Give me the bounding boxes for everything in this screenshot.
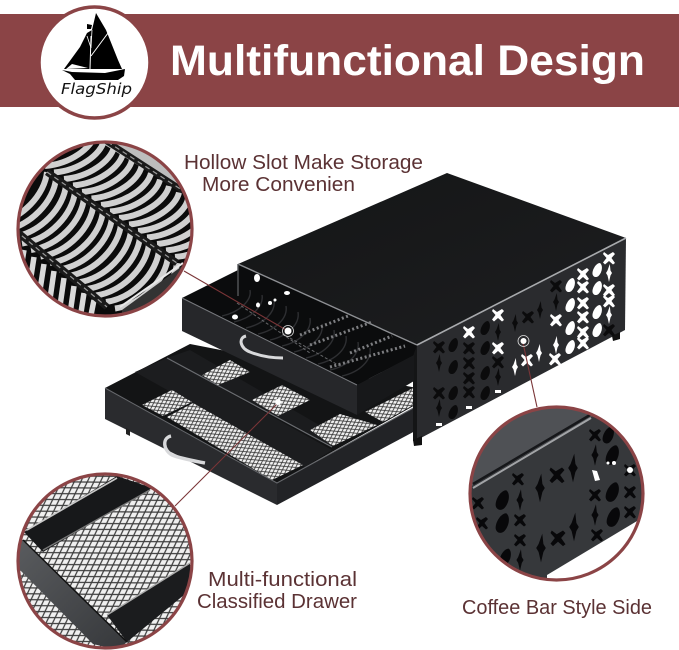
drawer handle bbox=[165, 436, 205, 463]
drawer handle bbox=[241, 336, 283, 358]
lower stripes bbox=[20, 250, 94, 320]
logo wordmark: FlagShip bbox=[61, 80, 132, 98]
icon: sailing ship bbox=[62, 13, 125, 80]
divider band upper bbox=[24, 476, 152, 552]
label: classified drawer bbox=[197, 568, 357, 613]
label: hollow slot: Hollow Slot Make Storage bbox=[184, 151, 423, 174]
logo: FlagShip bbox=[39, 7, 150, 118]
label: coffee bar side: Coffee Bar Style Side bbox=[462, 596, 652, 619]
leader line: side bbox=[518, 336, 537, 407]
cabinet top bbox=[238, 173, 626, 345]
label: hollow slot: More Convenien bbox=[202, 173, 355, 196]
leader line: slot bbox=[184, 271, 294, 336]
rack bars bbox=[15, 137, 185, 307]
divider band lower bbox=[107, 563, 190, 642]
label: classified drawer: Classified Drawer bbox=[197, 590, 357, 613]
arcs upper bbox=[45, 144, 190, 260]
product: drawer organizer bbox=[105, 173, 626, 505]
detail circle: mesh drawer bbox=[15, 470, 195, 650]
side cut-outs bbox=[472, 427, 636, 571]
cut-outs: dark bbox=[433, 280, 615, 419]
title: Multifunctional Design bbox=[170, 37, 645, 85]
detail circle: hollow slots bbox=[16, 140, 194, 318]
arcs middle bbox=[20, 172, 180, 312]
top strip bbox=[106, 144, 178, 184]
leader line: drawer bbox=[175, 399, 281, 506]
detail circle: coffee side bbox=[465, 402, 650, 590]
label: classified drawer: Multi-functional bbox=[208, 568, 357, 591]
cabinet side panel bbox=[413, 238, 626, 446]
slot rack bbox=[222, 290, 370, 376]
lower drawer bbox=[105, 344, 417, 505]
upper drawer bbox=[182, 264, 417, 415]
drawer wall bbox=[16, 538, 127, 650]
label: hollow slot bbox=[184, 151, 423, 196]
header banner bbox=[0, 14, 679, 107]
cut-outs: see-through bbox=[436, 252, 615, 426]
